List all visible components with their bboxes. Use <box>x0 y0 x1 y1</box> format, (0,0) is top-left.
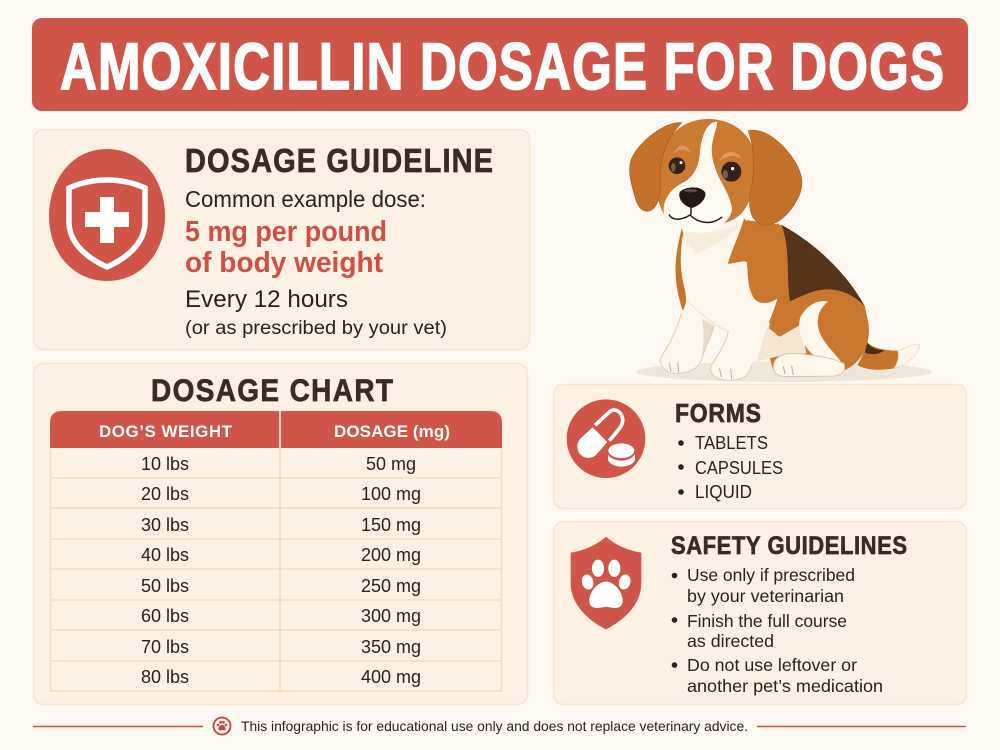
head <box>658 119 755 227</box>
list: forms: TABLETS <box>695 433 768 453</box>
dark saddle <box>782 225 865 307</box>
table rows: 150 mg <box>361 515 421 535</box>
list: safety points <box>672 565 883 696</box>
table rows: 400 mg <box>361 667 421 687</box>
table rows: 20 lbs <box>141 484 189 504</box>
list: forms: CAPSULES <box>695 458 783 478</box>
table header: DOSAGE (mg) <box>334 422 450 441</box>
heading: SAFETY GUIDELINES <box>671 532 907 559</box>
list: safety points: as directed <box>687 631 774 651</box>
table rows: 70 lbs <box>141 637 189 657</box>
table rows: 40 lbs <box>141 545 189 565</box>
chest shadow <box>683 223 740 254</box>
shoulder orange <box>728 218 815 337</box>
heading: FORMS <box>675 400 761 428</box>
table header <box>99 422 450 441</box>
blaze and muzzle <box>664 122 732 232</box>
title banner <box>32 18 968 111</box>
panel: dosage guideline <box>34 130 530 350</box>
table rows: 60 lbs <box>141 606 189 626</box>
table rows: 50 lbs <box>141 576 189 596</box>
right ear <box>748 130 802 225</box>
table rows: 50 mg <box>366 454 416 474</box>
text: frequency: Every 12 hours <box>185 286 348 313</box>
list: safety points: Use only if prescribed <box>687 565 855 585</box>
list: safety points: by your veterinarian <box>687 586 844 606</box>
table rows: 250 mg <box>361 576 421 596</box>
table rows: 100 mg <box>361 484 421 504</box>
brows <box>674 146 742 162</box>
title: AMOXICILLIN DOSAGE FOR DOGS <box>60 28 944 104</box>
icon: medical shield <box>49 149 165 281</box>
panel: dosage chart <box>34 364 528 704</box>
list: safety points: Finish the full course <box>687 611 847 631</box>
text: dose highlight: of body weight <box>185 247 383 279</box>
chest orange left <box>676 228 686 311</box>
table rows: 80 lbs <box>141 667 189 687</box>
table <box>50 411 502 691</box>
mouth <box>669 208 722 222</box>
table rows: 200 mg <box>361 545 421 565</box>
belly <box>757 325 807 362</box>
table rows: 350 mg <box>361 637 421 657</box>
table rows: 10 lbs <box>141 454 189 474</box>
left ear <box>630 123 682 211</box>
haunch orange <box>818 297 869 369</box>
nose <box>679 187 705 208</box>
hind foot <box>773 353 845 377</box>
table header: DOG’S WEIGHT <box>99 422 233 441</box>
eyes <box>669 157 685 174</box>
list: safety points: another pet’s medication <box>687 676 883 696</box>
panel: safety guidelines <box>554 522 966 704</box>
chest <box>678 218 777 332</box>
text: disclaimer: This infographic is for educational use only and does not replace veterinary advice. <box>241 718 748 734</box>
left front leg <box>661 307 714 373</box>
list: forms <box>678 433 783 502</box>
panel: forms <box>554 384 966 508</box>
icon: pills <box>567 399 645 478</box>
footer disclaimer <box>33 718 966 734</box>
text: dose highlight <box>185 216 387 279</box>
illustration: beagle puppy <box>630 119 932 382</box>
list: safety points: Do not use leftover or <box>687 655 857 675</box>
heading: DOSAGE GUIDELINE <box>185 142 493 179</box>
heading: DOSAGE CHART <box>151 373 394 408</box>
icon: paw badge <box>214 718 230 734</box>
text: example dose: Common example dose: <box>185 186 426 212</box>
icon: paw shield <box>571 537 641 629</box>
table rows: 30 lbs <box>141 515 189 535</box>
text: dose highlight: 5 mg per pound <box>185 216 387 248</box>
table rows <box>141 454 421 687</box>
right front leg <box>711 297 777 380</box>
table rows: 300 mg <box>361 606 421 626</box>
tail <box>857 342 919 370</box>
body <box>745 220 869 370</box>
haunch white <box>799 301 847 369</box>
list: forms: LIQUID <box>695 482 752 502</box>
text: prescription note: (or as prescribed by your vet) <box>185 318 447 339</box>
